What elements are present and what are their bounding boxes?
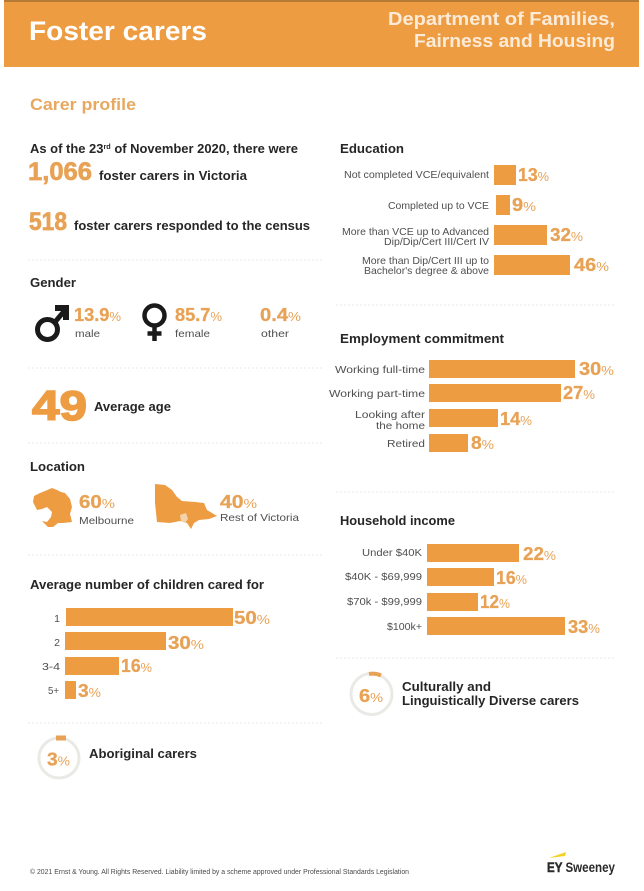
bar: 1 child: 1: [54, 613, 60, 625]
stat: 518 responded: [29, 208, 310, 236]
stat: Aboriginal carers: Aboriginal carers: [89, 747, 197, 761]
female value: 85.7%: [175, 305, 222, 325]
bar: not completed VCE: 13%: [518, 165, 549, 185]
icon: male symbol: [38, 305, 69, 340]
gender heading: Gender: [30, 276, 76, 290]
bar: retired: 8%: [471, 433, 494, 453]
chart: employment commitment: [329, 332, 614, 453]
intro text: As of the 23: [30, 142, 101, 156]
bar: 2 children: [54, 632, 204, 653]
bar: 1 child: [54, 608, 270, 628]
bar: working full-time: [335, 359, 614, 379]
other label: other: [261, 328, 290, 340]
department name: [388, 8, 615, 51]
department name: Department of Families,: [388, 8, 615, 29]
ring: 6%: [351, 674, 392, 714]
bar: under $40K: 22%: [523, 544, 556, 564]
title: Foster carers: [29, 16, 207, 46]
bar: looking after the home: 14%: [500, 409, 532, 429]
Melbourne value: 60%: [79, 492, 115, 512]
male label: male: [75, 328, 100, 340]
bar: looking after the home: the home: [376, 420, 425, 432]
bar: $100k+: 33%: [568, 617, 600, 637]
stat: culturally and linguistically diverse carers: Linguistically Diverse carers: [402, 694, 579, 708]
ring: 3%: 3%: [47, 750, 70, 770]
stat: average age: [32, 382, 171, 429]
bar: not completed VCE: Not completed VCE/equivalent: [344, 169, 489, 181]
stat: 1,066 foster carers: 1,066: [28, 158, 92, 186]
icon: Victoria map: [155, 484, 217, 529]
location panel: [30, 460, 299, 529]
male value: 13.9%: [74, 305, 121, 325]
chart: education: [340, 142, 609, 277]
logo: EY Sweeney: [547, 852, 615, 875]
bar: more than VCE: [342, 225, 583, 248]
bar: $40K - $69,999: [345, 568, 527, 588]
icon: Melbourne map: [33, 488, 72, 527]
location heading: Location: [30, 460, 85, 474]
employment heading: Employment commitment: [340, 332, 505, 346]
stat: 518 responded: 518: [29, 208, 67, 236]
bar: under $40K: Under $40K: [362, 547, 422, 559]
bar: $70k - $99,999: $70k - $99,999: [347, 596, 422, 608]
icon: female symbol: [144, 306, 164, 341]
footer copyright: © 2021 Ernst & Young. All Rights Reserved. Liability limited by a scheme approved under Professional Standards Legislation: [30, 868, 409, 876]
stat: average age: Average age: [94, 400, 171, 414]
bar: working full-time: 30%: [579, 359, 614, 379]
bar: 3-4 children: 3-4: [42, 661, 60, 673]
bar: retired: Retired: [387, 438, 425, 450]
intro text: rd: [103, 144, 111, 151]
stat: 1,066 foster carers: foster carers in Victoria: [99, 169, 248, 183]
bar: more than Dip: Bachelor's degree & above: [364, 265, 489, 277]
rest of Victoria label: Rest of Victoria: [220, 512, 299, 524]
bar: 2 children: 2: [54, 637, 60, 649]
bar: completed up to VCE: 9%: [512, 195, 536, 215]
bar: working full-time: Working full-time: [335, 364, 425, 376]
intro text: of November 2020, there were: [111, 142, 298, 156]
bar: working part-time: [329, 383, 595, 403]
logo: EY Sweeney: EY Sweeney: [547, 859, 615, 875]
stat: 1,066 foster carers: [28, 158, 248, 186]
bar: 2 children: 30%: [168, 633, 204, 653]
stat: average age: 49: [32, 382, 87, 429]
other value: 0.4%: [260, 305, 301, 325]
chart heading: Average number of children cared for: [30, 578, 264, 592]
bar: $40K - $69,999: $40K - $69,999: [345, 571, 422, 583]
gender panel: [30, 276, 301, 341]
bar: retired: [387, 433, 494, 453]
bar: looking after the home: [355, 409, 532, 432]
bar: more than Dip: 46%: [574, 255, 609, 275]
stat: Aboriginal carers: [39, 736, 197, 778]
bar: $100k+: [387, 617, 600, 637]
stat: culturally and linguistically diverse carers: [351, 674, 579, 714]
bar: under $40K: [362, 544, 556, 564]
ring: 6%: 6%: [359, 686, 383, 706]
chart: average number of children cared for: [30, 578, 270, 701]
ring: 3%: [39, 736, 79, 778]
department name: Fairness and Housing: [414, 30, 615, 51]
female label: female: [175, 328, 210, 340]
bar: more than VCE: Dip/Dip/Cert III/Cert IV: [384, 236, 489, 248]
stat: culturally and linguistically diverse carers: Culturally and: [402, 680, 491, 694]
bar: $40K - $69,999: 16%: [496, 568, 527, 588]
bar: completed up to VCE: Completed up to VCE: [388, 200, 489, 212]
bar: $100k+: $100k+: [387, 621, 422, 633]
bar: 3-4 children: [42, 656, 152, 676]
bar: more than VCE: More than VCE up to Advanced: [342, 226, 489, 238]
header banner: [4, 0, 639, 67]
bar: looking after the home: Looking after: [355, 409, 426, 421]
bar: 3-4 children: 16%: [121, 656, 152, 676]
income heading: Household income: [340, 514, 455, 528]
education heading: Education: [340, 142, 404, 156]
bar: $70k - $99,999: [347, 592, 510, 612]
bar: working part-time: 27%: [563, 383, 595, 403]
bar: 5+ children: [48, 681, 101, 701]
rest of Victoria value: 40 %: [220, 492, 258, 512]
bar: more than VCE: 32%: [550, 225, 583, 245]
bar: more than Dip: More than Dip/Cert III up to: [362, 255, 489, 267]
chart: household income: [340, 514, 600, 637]
Melbourne label: Melbourne: [79, 515, 134, 527]
section heading: carer profile: Carer profile: [30, 96, 136, 114]
bar: not completed VCE: [344, 165, 549, 185]
bar: 1 child: 50%: [234, 608, 270, 628]
bar: 5+ children: 3%: [78, 681, 101, 701]
bar: working part-time: Working part-time: [329, 388, 425, 400]
stat: 518 responded: foster carers responded to the census: [74, 219, 310, 233]
bar: more than Dip: [362, 255, 609, 277]
bar: $70k - $99,999: 12%: [480, 592, 510, 612]
bar: 5+ children: 5+: [48, 685, 59, 697]
bar: completed up to VCE: [388, 195, 536, 215]
